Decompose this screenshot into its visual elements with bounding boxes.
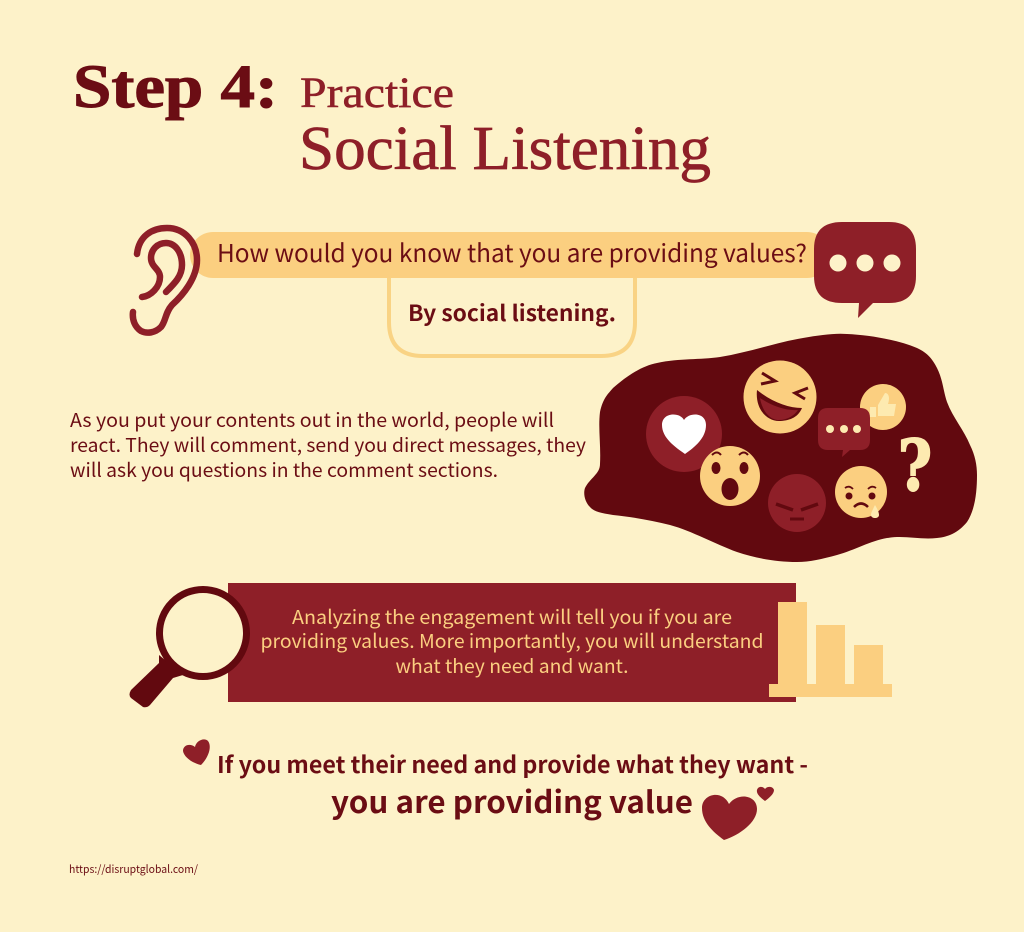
answer box: by social listening bbox=[389, 270, 635, 356]
paragraph: people react: will ask you questions in the comment sections. bbox=[70, 456, 498, 483]
icon: laughing face bbox=[744, 360, 816, 434]
title: practice: Practice bbox=[300, 70, 454, 117]
title: step number: Step 4: bbox=[73, 54, 278, 121]
panel: analyzing engagement bbox=[228, 583, 796, 702]
panel text: Analyzing the engagement will tell you if you are bbox=[292, 603, 732, 630]
icon: heart reaction bbox=[646, 396, 722, 472]
icon: ear bbox=[133, 228, 197, 333]
paragraph: people react: react. They will comment, send you direct messages, they bbox=[70, 431, 586, 458]
icon: large heart bbox=[702, 795, 757, 840]
paragraph: people react bbox=[70, 406, 586, 483]
icon: question mark: ? bbox=[898, 424, 932, 507]
title bbox=[73, 54, 711, 183]
icon: surprised face bbox=[700, 446, 760, 506]
icon: chat bubble bbox=[818, 408, 870, 457]
icon: small heart bbox=[757, 787, 774, 801]
panel text bbox=[260, 603, 764, 679]
closing line: If you meet their need and provide what they want - bbox=[217, 746, 808, 780]
icon: crying face bbox=[835, 466, 887, 518]
question bar bbox=[190, 232, 830, 278]
icon: speech bubble bbox=[814, 222, 916, 318]
closing emphasis: you are providing value bbox=[331, 778, 693, 822]
panel text: providing values. More importantly, you will understand bbox=[260, 627, 764, 654]
blob with reaction icons bbox=[584, 334, 977, 562]
paragraph: people react: As you put your contents out in the world, people will bbox=[70, 406, 554, 433]
answer text: By social listening. bbox=[408, 296, 616, 328]
icon: bar chart bbox=[769, 602, 892, 697]
title: social listening: Social Listening bbox=[299, 115, 711, 183]
icon: thumbs up bbox=[860, 384, 906, 430]
icon: magnifying glass bbox=[130, 590, 246, 707]
icon: angry face bbox=[768, 474, 826, 532]
question text: How would you know that you are providing values? bbox=[217, 235, 807, 270]
source url: https://disruptglobal.com/ bbox=[69, 861, 199, 877]
panel text: what they need and want. bbox=[396, 652, 628, 679]
icon: heart left bbox=[183, 739, 210, 765]
